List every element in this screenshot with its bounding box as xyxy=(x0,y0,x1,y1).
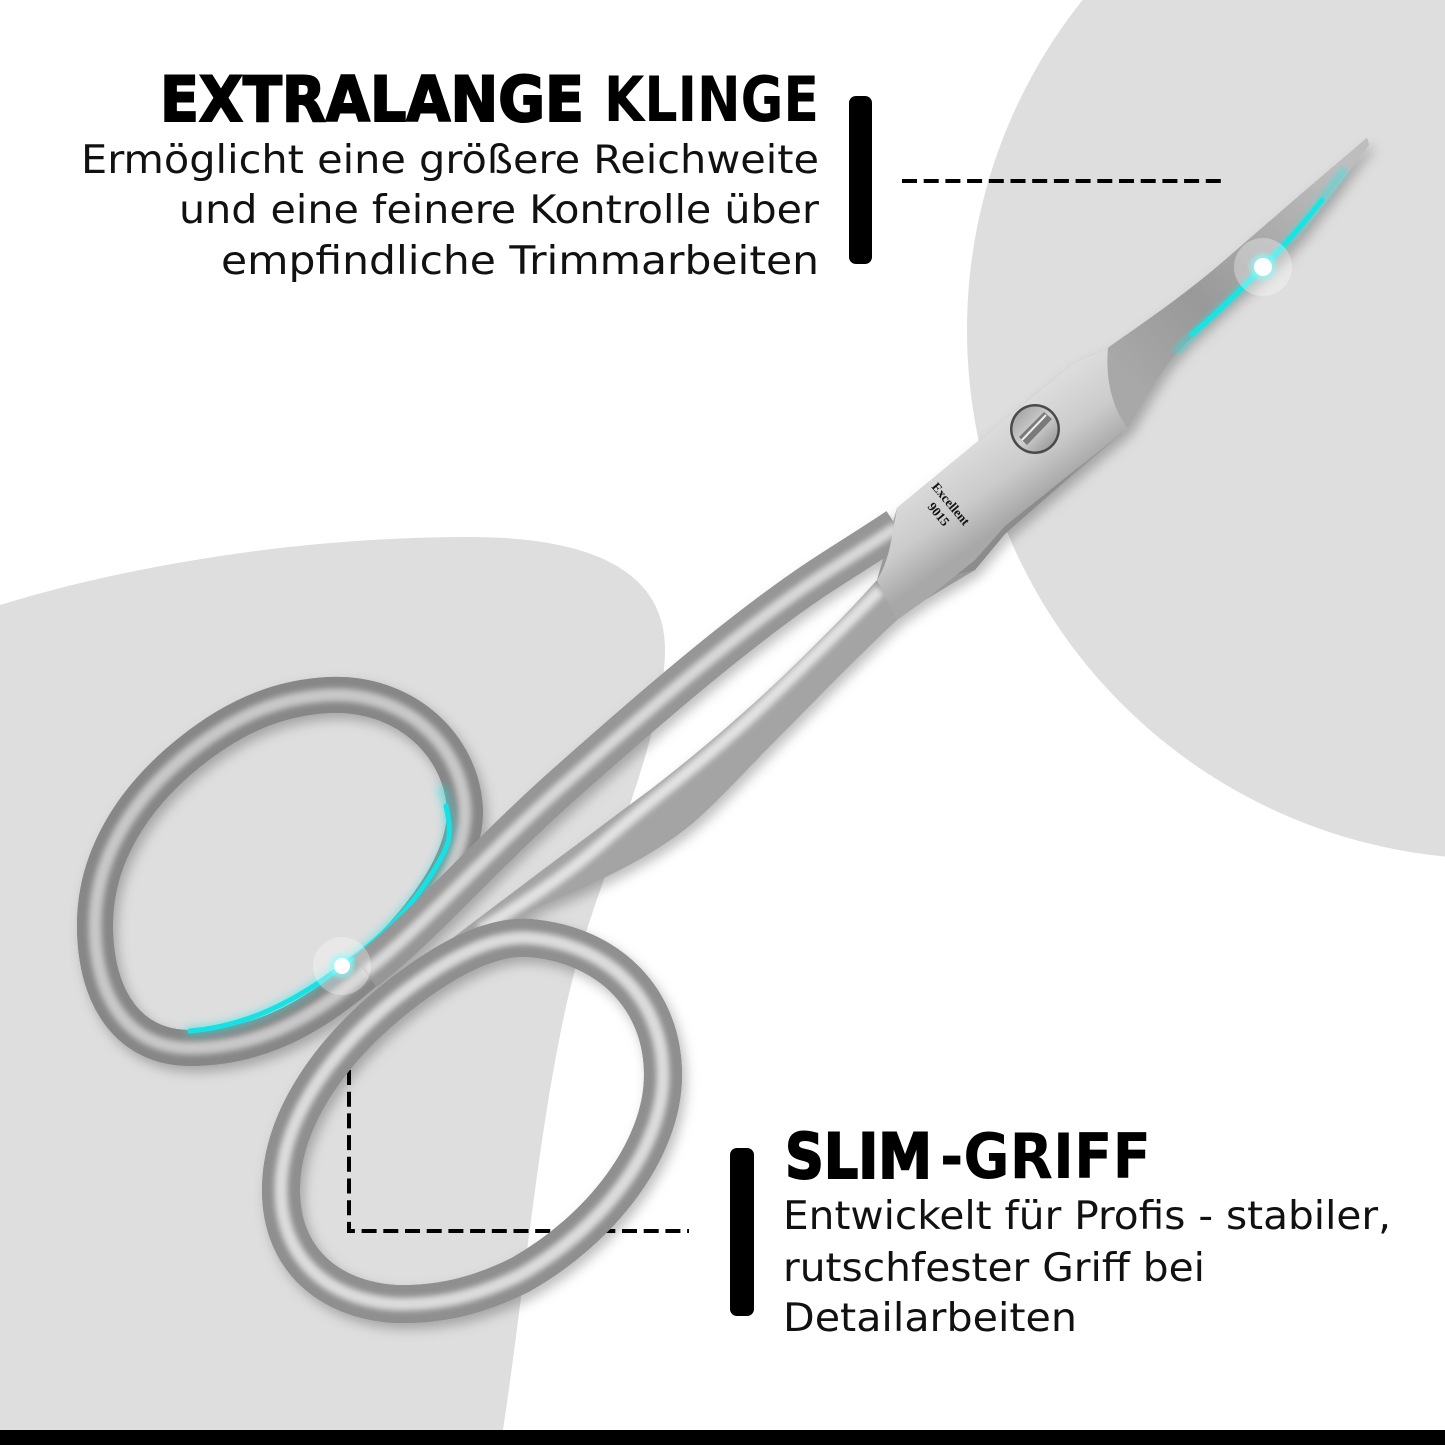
leader line: grip callout xyxy=(349,1070,689,1231)
engraving: brand and model: 9015 xyxy=(925,499,953,529)
blade xyxy=(1107,138,1369,428)
body text: blade description: Ermöglicht eine größere Reichweite xyxy=(81,138,819,183)
teal edge highlight: blade xyxy=(1178,172,1343,350)
background: grey circle top right xyxy=(967,0,1445,859)
scissors silhouette with shadow xyxy=(95,138,1369,1304)
accent bar: blade callout xyxy=(849,96,872,264)
body text: grip description xyxy=(783,1194,1391,1341)
heading: extralange Klinge xyxy=(160,63,819,136)
background: grey blob bottom left xyxy=(0,537,665,1430)
pivot body xyxy=(877,348,1128,620)
heading: extralange Klinge: EXTRALANGE xyxy=(160,63,584,136)
heading: slim-griff xyxy=(785,1120,1151,1193)
callout: slim grip xyxy=(730,1120,1391,1341)
body text: blade description: empfindliche Trimmarbeiten xyxy=(221,239,819,284)
marker: blade point xyxy=(1234,238,1292,296)
shank: upper xyxy=(365,527,897,972)
leader line: blade callout xyxy=(902,179,1222,183)
body text: blade description: und eine feinere Kontrolle über xyxy=(179,188,820,233)
black footer strip xyxy=(0,1430,1445,1445)
heading: slim-griff: -GRIFF xyxy=(940,1120,1151,1193)
heading: slim-griff: SLIM xyxy=(785,1120,932,1193)
accent bar: grip callout xyxy=(730,1148,754,1316)
teal highlight: upper handle xyxy=(190,790,449,1031)
callout: extralange Klinge xyxy=(81,63,872,284)
body text: grip description: rutschfester Griff bei xyxy=(783,1246,1205,1291)
scissors xyxy=(95,138,1369,1304)
body text: blade description xyxy=(81,138,820,284)
tang under pivot body xyxy=(955,424,1128,575)
finger loop: lower handle xyxy=(281,938,663,1304)
finger loop: upper handle xyxy=(95,695,465,1048)
body text: grip description: Entwickelt für Profis - stabiler, xyxy=(783,1194,1391,1239)
shank: lower xyxy=(430,580,897,965)
pivot screw xyxy=(1010,404,1060,454)
engraving: brand and model: Excellent xyxy=(929,479,974,529)
body text: grip description: Detailarbeiten xyxy=(783,1296,1077,1341)
heading: extralange Klinge: KLINGE xyxy=(604,63,819,136)
marker: handle point xyxy=(313,937,371,995)
